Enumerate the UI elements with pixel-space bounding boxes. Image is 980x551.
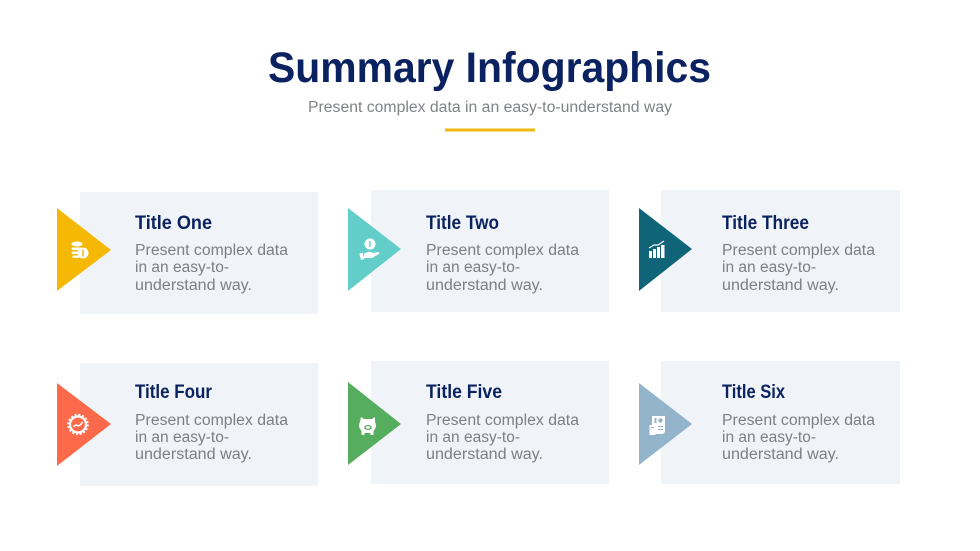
heading: Title Four (135, 382, 213, 403)
body text: understand way. (135, 277, 252, 294)
heading: Title Two (426, 213, 499, 234)
green triangle (348, 382, 401, 465)
body text (722, 412, 875, 463)
panel: title five (348, 361, 609, 484)
panel: title one (57, 192, 318, 314)
body text: understand way. (135, 446, 252, 463)
icon: rising bar chart (649, 241, 664, 258)
dark teal triangle (639, 208, 692, 291)
body text: in an easy-to- (135, 429, 229, 446)
panel: title six (639, 361, 900, 484)
body text: understand way. (426, 446, 543, 463)
icon: coins (72, 242, 88, 258)
body text (135, 412, 288, 463)
coral triangle (57, 383, 111, 466)
panel: title four (57, 363, 318, 486)
body text (426, 412, 579, 463)
body text: Present complex data (722, 242, 875, 259)
body text: Present complex data (426, 412, 579, 429)
blue-grey triangle (639, 383, 692, 465)
heading: Title One (135, 213, 212, 234)
body text: Present complex data (722, 412, 875, 429)
heading: Title Five (426, 382, 502, 403)
body text: understand way. (426, 277, 543, 294)
body text: in an easy-to- (426, 259, 520, 276)
body text: in an easy-to- (722, 259, 816, 276)
body text: understand way. (722, 446, 839, 463)
body text (722, 242, 875, 294)
yellow triangle (57, 208, 111, 291)
icon: report documents (650, 416, 665, 435)
body text: in an easy-to- (135, 259, 229, 276)
icon: gear with trend (68, 415, 88, 434)
heading: Title Three (722, 213, 809, 234)
body text: in an easy-to- (722, 429, 816, 446)
body text: Present complex data (135, 242, 288, 259)
teal triangle (348, 208, 401, 291)
icon: hand holding coin (359, 238, 379, 260)
body text: understand way. (722, 277, 839, 294)
panel: title two (348, 190, 609, 312)
heading: Title Six (722, 382, 785, 403)
panel: title three (639, 190, 900, 312)
body text (426, 242, 579, 294)
icon: piggy bank (359, 417, 376, 435)
subtitle: Present complex data in an easy-to-understand way (308, 99, 672, 116)
body text: in an easy-to- (426, 429, 520, 446)
yellow accent underline (445, 128, 535, 132)
body text: Present complex data (135, 412, 288, 429)
body text (135, 242, 288, 294)
body text: Present complex data (426, 242, 579, 259)
title: Summary Infographics (268, 44, 711, 92)
